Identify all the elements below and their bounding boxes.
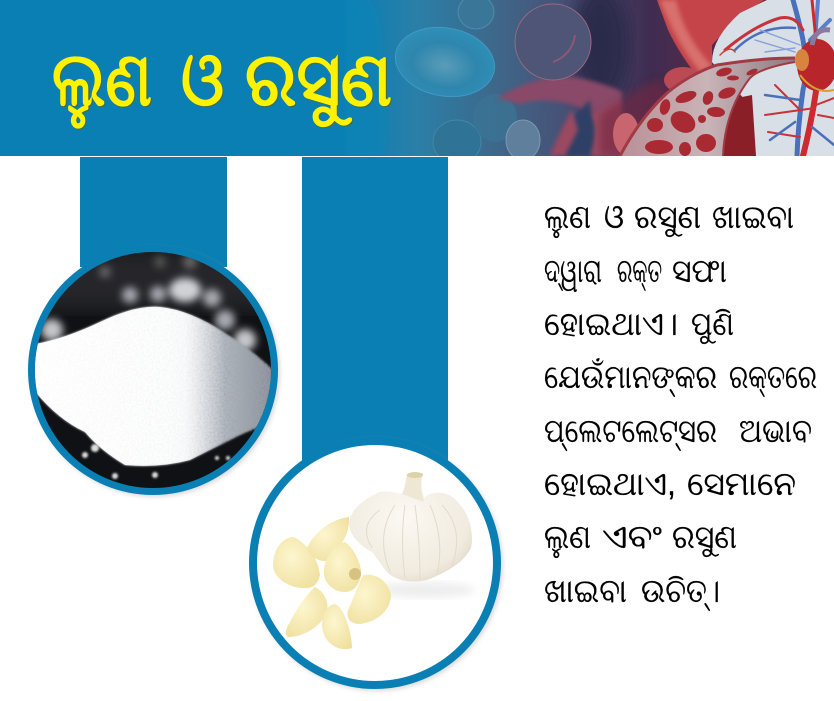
body text: ହୋଇଥାଏ।	[544, 305, 678, 342]
body text: ଉଚିତ୍।	[641, 572, 720, 611]
blood cells background	[378, 0, 633, 156]
body text: ଖାଇବା	[712, 198, 794, 235]
body text: ଅଭାବ	[739, 412, 812, 449]
body text: ସେମାନେ	[687, 465, 796, 502]
body text: ଲୁଣ	[544, 198, 591, 238]
body text: ସଫା	[672, 252, 727, 289]
header banner	[0, 0, 834, 164]
body text: ରସୁଣ	[672, 518, 737, 557]
body text: ପୁଣି	[691, 305, 734, 344]
salt photo circle	[28, 245, 280, 497]
title: ଲୁଣ	[52, 37, 152, 130]
body text	[544, 198, 817, 611]
body text: ହୋଇଥାଏ,	[544, 465, 676, 502]
garlic photo circle	[249, 437, 503, 691]
body text: ପ୍ଲେଟଲେଟ୍‌ସର	[544, 412, 717, 451]
connector bars	[80, 157, 448, 477]
body text: ଯେଉଁମାନଙ୍କର	[544, 358, 717, 397]
body text: ଲୁଣ	[544, 518, 591, 558]
body text: ରସୁଣ	[634, 198, 701, 237]
body text: ରକ୍ତ	[617, 252, 662, 291]
body text: ଦ୍ୱାରା	[544, 252, 602, 292]
title	[52, 37, 392, 130]
arteries and veins	[720, 0, 834, 156]
body text: ଏବଂ	[602, 518, 662, 555]
artery and heart illustration	[600, 0, 834, 156]
body text: ଓ	[604, 198, 624, 235]
body text: ଖାଇବା	[544, 572, 627, 609]
garlic bulb	[349, 490, 472, 582]
title: ରସୁଣ	[245, 37, 392, 127]
garlic cloves	[273, 537, 320, 588]
title: ଓ	[181, 37, 224, 121]
